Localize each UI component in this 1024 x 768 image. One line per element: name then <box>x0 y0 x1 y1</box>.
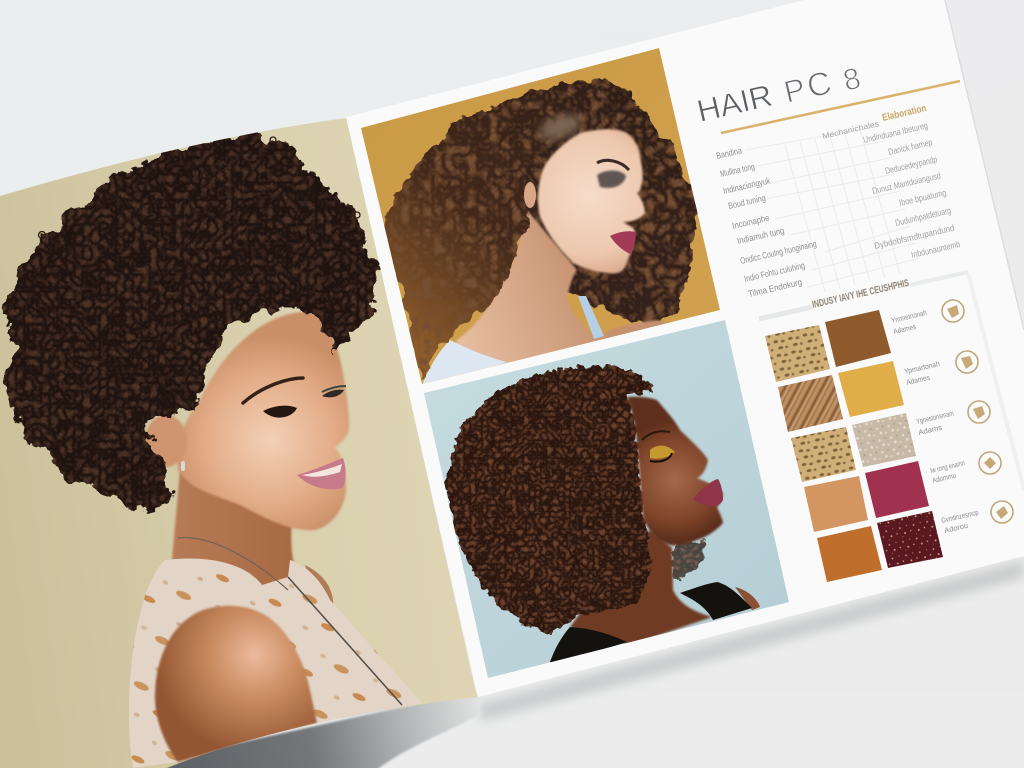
right column labels <box>862 120 961 260</box>
swatch labels: Adorou <box>943 521 969 535</box>
black top right <box>680 582 752 620</box>
neck and chest <box>570 530 712 645</box>
chart: hair porosity table <box>715 103 961 299</box>
eye <box>263 406 297 418</box>
title: P <box>781 71 809 110</box>
panel header with bar <box>759 272 968 319</box>
row labels: Indio Fohtu culuhing <box>743 260 806 284</box>
bare arm <box>155 606 317 762</box>
blue strap <box>578 296 604 339</box>
row labels: Ondicc Coulng hunginaing <box>739 239 817 266</box>
panel header with bar: INDUSY IAVY IHE CEUSHPHIS <box>811 278 910 311</box>
swatch labels: Adames <box>892 322 917 336</box>
panel: left page with large portrait <box>0 110 490 768</box>
swatch: garnet glitter <box>877 511 943 568</box>
icon: badge 4 <box>979 452 1001 474</box>
row labels: Mullina tong <box>719 161 756 179</box>
swatch labels: Ypmartonah <box>903 359 941 376</box>
table grid <box>745 126 920 292</box>
swatch labels: Gvmtinzesmop <box>940 508 979 525</box>
row labels: Bandina <box>715 145 743 161</box>
photo: curly hair on pale blue background <box>420 315 800 685</box>
title: HAIR <box>694 78 776 129</box>
face <box>177 312 349 530</box>
face <box>538 129 645 274</box>
hair behind head and neck <box>520 105 697 323</box>
right column labels: Danick hamep <box>887 137 933 157</box>
right column labels: Deducedeypandp <box>884 154 938 176</box>
gold title rule <box>721 81 960 133</box>
panel: right page <box>346 0 1024 697</box>
hair loose curls <box>7 137 360 441</box>
white top <box>422 340 507 384</box>
swatch labels: Adommu <box>931 471 957 485</box>
right column labels: Inbdunauntemb <box>910 239 961 260</box>
curly hair <box>383 79 697 377</box>
black top left <box>550 627 627 664</box>
swatch labels: Ymmetrionah <box>890 308 928 325</box>
face <box>627 397 723 545</box>
icon: badge 3 <box>968 401 990 423</box>
row labels: Indinaciongyuk <box>722 175 772 196</box>
swatch labels: Adams <box>917 423 943 437</box>
dress seam <box>288 577 402 705</box>
magazine shadow on table <box>480 560 1024 722</box>
icon: badge 1 <box>942 300 964 322</box>
neck and chest <box>448 210 670 378</box>
neck <box>170 472 295 585</box>
swatch labels: Ygnestonsmam <box>915 409 954 426</box>
row labels: Tilma Endokurg <box>747 277 803 299</box>
icon: badge 5 <box>991 501 1013 523</box>
right column labels: Dunuz Mantduiangusd <box>871 170 942 196</box>
row labels: Incoinaphe <box>731 213 770 231</box>
title <box>694 62 864 129</box>
swatch: leopard 2 <box>791 427 856 482</box>
lips <box>693 479 723 506</box>
panel outline <box>968 273 1024 490</box>
ear <box>145 415 187 467</box>
right column labels: Iboe bpuatumg <box>898 187 947 208</box>
lips <box>610 231 635 254</box>
panel: colour swatches <box>759 272 1024 582</box>
ear <box>524 182 536 208</box>
swatch: brown <box>825 310 891 367</box>
table header <box>821 103 928 141</box>
dress with floral print <box>129 558 422 768</box>
eyebrow <box>597 160 629 170</box>
photo: curly hair on gold background <box>350 40 730 390</box>
title: C <box>803 63 835 105</box>
table header: Mechanichales <box>821 119 880 141</box>
row labels: Boud tuning <box>727 193 766 211</box>
table header: Elaboration <box>881 103 928 124</box>
swatch: raspberry <box>865 461 929 518</box>
eye shadow and eye <box>597 171 626 188</box>
swatch: copper <box>817 526 882 582</box>
eyebrow <box>642 431 670 440</box>
icon: badge 2 <box>956 351 978 373</box>
hair <box>3 137 377 517</box>
swatch: gold <box>838 361 904 417</box>
back curls behind neck <box>672 540 705 580</box>
swatch: beige speckle <box>852 413 916 467</box>
page background <box>0 110 490 768</box>
eyebrow <box>243 378 303 403</box>
row labels <box>715 145 817 299</box>
swatch: wood hair <box>778 375 843 432</box>
title: 8 <box>840 62 864 98</box>
necklace <box>178 538 288 590</box>
row labels: Indiamuh tung <box>736 225 785 246</box>
earring <box>181 461 185 471</box>
lips <box>297 458 346 489</box>
back shoulder <box>305 565 334 604</box>
far eye <box>322 390 344 397</box>
swatch labels: Iw rong enamn <box>929 458 966 475</box>
eyelid line <box>650 453 672 462</box>
curly hair <box>447 366 653 633</box>
back shoulder <box>735 587 760 610</box>
swatch: leopard <box>765 325 830 382</box>
swatch labels <box>890 308 979 535</box>
right column labels: Dybdobfsmdtupandund <box>873 223 955 251</box>
right column labels: Dudunhpatdetuarg <box>894 205 952 228</box>
swatch labels: Adames <box>905 373 931 387</box>
scalp parting <box>536 110 584 144</box>
swatch: peach <box>804 476 868 532</box>
fold: grey underside of left page <box>160 690 480 768</box>
portrait: woman with afro, body <box>3 137 422 768</box>
gold eye shadow <box>650 446 675 459</box>
right column labels: Undinduana Ibetureg <box>862 120 929 145</box>
